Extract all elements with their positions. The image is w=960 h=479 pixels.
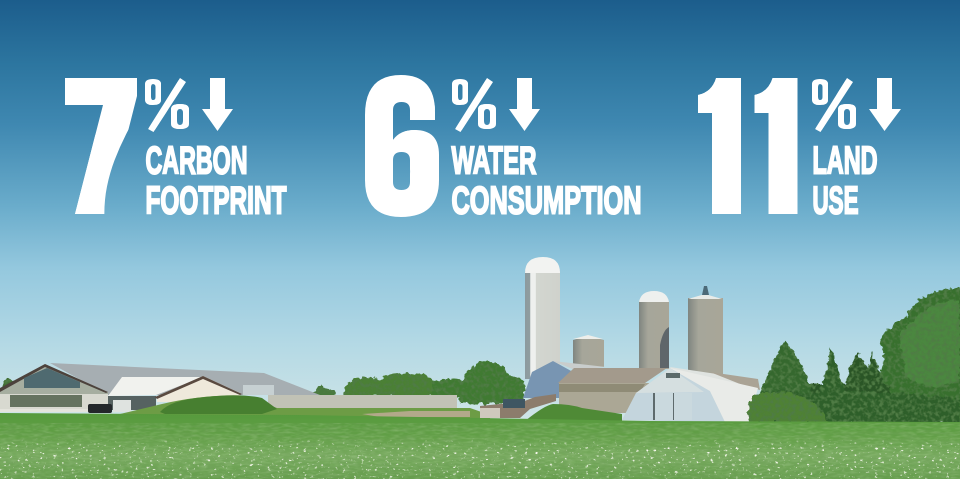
right silo — [688, 286, 723, 374]
woodpile — [480, 394, 556, 418]
backing foliage behind conifers — [800, 384, 890, 414]
cream wing wall — [157, 376, 240, 402]
distant trees left of centre — [0, 361, 524, 404]
clover flowers — [0, 438, 960, 479]
icon: down arrow — [202, 78, 233, 131]
number 11: 11 — [666, 40, 818, 255]
white wing roof — [108, 377, 203, 396]
label: water: WATER — [452, 140, 536, 182]
left farm barn — [0, 363, 320, 413]
small green hill before barns — [525, 404, 622, 421]
number 7: 7 — [50, 41, 141, 255]
right tree line — [748, 288, 960, 423]
stat: 11% land use — [698, 78, 901, 215]
conifers — [758, 340, 815, 398]
silver bins — [243, 385, 274, 395]
tan barn — [558, 368, 667, 413]
white arched barn — [622, 367, 760, 423]
gable window — [24, 368, 80, 388]
icon: down arrow — [869, 78, 901, 131]
label: consumption: CONSUMPTION — [452, 180, 642, 222]
label: carbon: CARBON — [146, 140, 248, 182]
percent sign: % — [452, 66, 497, 146]
label: footprint: FOOTPRINT — [146, 180, 287, 222]
percent sign: % — [145, 66, 190, 146]
main grey roof — [50, 363, 320, 395]
end gable wall — [0, 364, 108, 410]
number 6: 6 — [360, 40, 444, 255]
label: use: USE — [812, 180, 858, 222]
grass texture — [0, 423, 960, 479]
grass berm — [120, 396, 490, 420]
percent sign: % — [812, 66, 857, 146]
lower porch openings — [0, 394, 108, 410]
blue barn — [523, 361, 606, 398]
tall white silo — [525, 257, 560, 379]
middle silo — [639, 291, 669, 369]
concrete wall — [268, 395, 457, 410]
dirt patch — [362, 411, 470, 417]
icon: down arrow — [509, 78, 540, 131]
stat: 7% carbon footprint — [65, 78, 287, 215]
parked truck — [88, 404, 112, 413]
stat: 6% water consumption — [365, 75, 640, 217]
farm scene — [0, 257, 960, 479]
grass field — [0, 413, 960, 479]
label: land: LAND — [812, 140, 878, 182]
big leafy tree — [879, 288, 960, 420]
small silo — [573, 335, 604, 367]
hedge — [748, 391, 960, 423]
